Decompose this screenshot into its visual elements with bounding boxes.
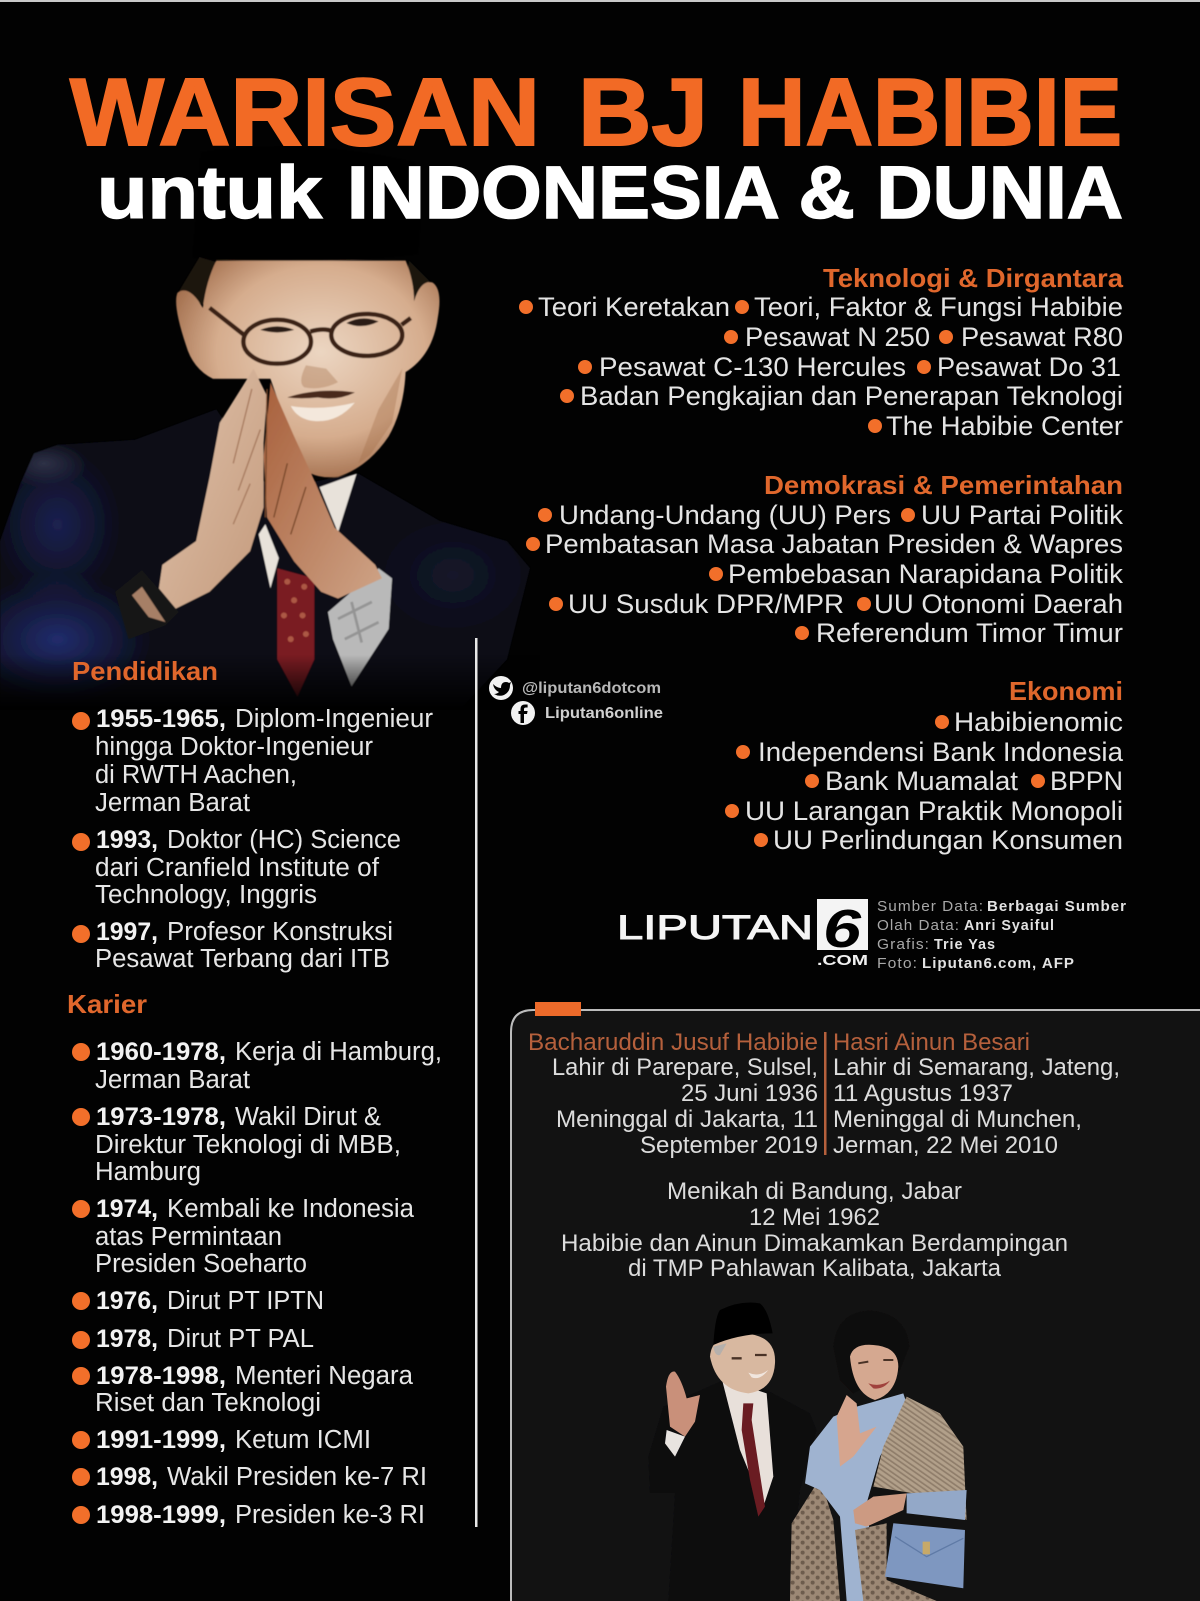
glasses [210,308,411,364]
biography: Ainun: Meninggal di Munchen, [833,1106,1082,1133]
shirt [722,1378,773,1507]
entry 1991-1999: Ketum ICMI [235,1426,371,1454]
title: untuk [97,151,323,234]
biography: Ainun: Jerman, 22 Mei 2010 [833,1132,1058,1159]
entry 1997: Pesawat Terbang dari ITB [95,945,390,973]
list: Referendum Timor Timur [816,618,1123,648]
entry 1978 [72,1325,314,1353]
list: The Habibie Center [886,411,1123,441]
list: Teori Keretakan [538,292,730,322]
entry 1955-1965: 1955-1965, [96,705,226,733]
list [725,707,1123,855]
entry 1998-1999: 1998-1999, [96,1501,226,1529]
title: HABIBIE [738,59,1122,166]
entry 1978-1998: Riset dan Teknologi [95,1389,321,1417]
credits: Berbagai Sumber [987,898,1127,915]
head [710,1333,775,1393]
list: Pesawat C-130 Hercules [599,352,906,382]
left shawl [790,1478,840,1601]
biography: Habibie: Meninggal di Jakarta, 11 [556,1106,818,1133]
shawl [873,1397,967,1520]
list: Bank Muamalat [825,766,1019,796]
entry 1973-1978: Direktur Teknologi di MBB, [95,1131,401,1159]
entry 1976: 1976, [96,1287,158,1315]
entry 1997 [72,918,393,973]
resting hand [853,1493,907,1527]
waving hand [837,1395,877,1467]
entry 1998-1999 [72,1501,425,1529]
entry 1978: 1978, [96,1325,158,1353]
credits: Anri Syaiful [964,917,1055,934]
biography: Habibie [528,1029,818,1159]
entry 1978-1998: 1978-1998, [96,1362,226,1390]
credits: Trie Yas [934,936,996,953]
heading: Teknologi & Dirgantara [823,263,1124,293]
portrait fade to black [0,655,540,730]
credits: Foto: [877,955,918,972]
marriage and burial note [561,1178,1068,1282]
biography: Ainun [833,1029,1120,1159]
biography: Ainun: Hasri Ainun Besari [833,1029,1030,1056]
face [176,261,439,477]
peci hat [713,1302,773,1345]
lower batik [855,1523,937,1601]
list: UU Perlindungan Konsumen [773,825,1123,855]
entry 1973-1978: Hamburg [95,1158,201,1186]
list: Teori, Faktor & Fungsi Habibie [754,292,1123,322]
logo: Liputan6.com [617,899,868,969]
entry 1978-1998 [72,1362,414,1417]
panel: Teknologi & Dirgantara [519,263,1124,441]
title: INDONESIA & DUNIA [347,151,1123,234]
entry 1993: Doktor (HC) Science [167,826,401,854]
list: Habibienomic [954,707,1123,737]
biography: Habibie: Lahir di Parepare, Sulsel, [552,1054,818,1081]
entry 1974: 1974, [96,1195,158,1223]
tie [742,1403,765,1517]
shirt cuff [328,568,392,686]
list: BPPN [1050,766,1123,796]
entry 1991-1999 [72,1426,371,1454]
credits: Sumber Data: [877,898,984,915]
sleeve [907,1490,967,1520]
panel: Pendidikan [72,656,434,973]
entry 1998-1999: Presiden ke-3 RI [235,1501,425,1529]
entry 1976: Dirut PT IPTN [167,1287,324,1315]
entry 1960-1978: 1960-1978, [96,1038,226,1066]
orange tab [535,1002,581,1016]
icon: twitter [489,676,513,700]
entry 1993: Technology, Inggris [95,881,317,909]
social media handles: Liputan6online [545,705,663,722]
entry 1974 [72,1195,415,1278]
portrait photo: Habibie with hands together [0,257,530,696]
list: Independensi Bank Indonesia [758,737,1123,767]
waving hand [666,1372,700,1437]
list: Pesawat N 250 [745,322,930,352]
hat [193,147,419,262]
title: BJ [578,59,708,166]
entry 1997: Profesor Konstruksi [167,918,393,946]
list [526,500,1124,648]
left hand [159,369,267,609]
heading: Ekonomi [1009,676,1123,706]
biography: Habibie: September 2019 [640,1132,818,1159]
credits: Olah Data: [877,917,960,934]
panel: biography card [511,1002,1200,1601]
credits: Grafis: [877,936,930,953]
jacket [648,1382,817,1601]
vertical divider [475,638,478,1527]
marriage and burial note: di TMP Pahlawan Kalibata, Jakarta [628,1255,1002,1282]
list: Badan Pengkajian dan Penerapan Teknologi [580,381,1123,411]
entry 1955-1965: hingga Doktor-Ingenieur [95,733,374,761]
title [70,59,1123,234]
panel: Demokrasi & Pemerintahan [526,470,1124,648]
list [519,292,1123,441]
entry 1955-1965: Diplom-Ingenieur [235,705,434,733]
heading: Demokrasi & Pemerintahan [764,470,1123,500]
moustache and smile [287,391,355,398]
logo: Liputan6.com: .COM [817,952,868,969]
entry 1973-1978: Wakil Dirut & [235,1103,381,1131]
list: UU Otonomi Daerah [874,589,1123,619]
social media handles [489,676,663,725]
entry 1955-1965 [72,705,434,817]
entry 1955-1965: Jerman Barat [95,789,250,817]
entry 1960-1978: Kerja di Hamburg, [235,1038,442,1066]
entry 1974: Presiden Soeharto [95,1250,307,1278]
shirt collar [259,474,357,588]
credits [877,898,1127,972]
logo: Liputan6.com: LIPUTAN [617,909,813,947]
right hand [264,382,382,599]
photo: Habibie and Ainun [648,1302,967,1601]
marriage and burial note: Habibie dan Ainun Dimakamkan Berdampingan [561,1230,1068,1257]
tie [277,568,314,697]
list: UU Partai Politik [921,500,1124,530]
entry 1998: 1998, [96,1463,158,1491]
icon: facebook [511,701,535,725]
list: Pesawat R80 [961,322,1123,352]
entry 1973-1978: 1973-1978, [96,1103,226,1131]
entry 1993 [72,826,401,909]
entry 1998: Wakil Presiden ke-7 RI [167,1463,427,1491]
biography: Ainun: 11 Agustus 1937 [833,1080,1013,1107]
entry 1993: dari Cranfield Institute of [95,854,380,882]
heading: Pendidikan [72,656,218,686]
cheek and nose shading [301,365,402,463]
list: Pesawat Do 31 [937,352,1121,382]
marriage and burial note: 12 Mei 1962 [749,1204,880,1231]
entry 1974: Kembali ke Indonesia [167,1195,415,1223]
handbag [885,1523,965,1588]
entry 1991-1999: 1991-1999, [96,1426,226,1454]
heading: Karier [67,989,147,1019]
logo: Liputan6.com: 6 [823,899,862,959]
list: Pembebasan Narapidana Politik [728,559,1124,589]
entry 1976 [72,1287,324,1315]
entry 1960-1978: Jerman Barat [95,1066,250,1094]
entry 1960-1978 [72,1038,442,1094]
list: Undang-Undang (UU) Pers [559,500,891,530]
woman hair [833,1311,909,1393]
entry 1978-1998: Menteri Negara [235,1362,414,1390]
list: UU Larangan Praktik Monopoli [745,796,1123,826]
social media handles: @liputan6dotcom [522,680,661,697]
entry 1974: atas Permintaan [95,1223,282,1251]
biography: Ainun: Lahir di Semarang, Jateng, [833,1054,1120,1081]
entry 1978: Dirut PT PAL [167,1325,314,1353]
entry 1973-1978 [72,1103,401,1186]
list: Pembatasan Masa Jabatan Presiden & Wapres [545,529,1123,559]
biography: Habibie: Bacharuddin Jusuf Habibie [528,1029,818,1056]
panel: Karier [67,989,442,1529]
credits: Liputan6.com, AFP [922,955,1075,972]
entry 1997: 1997, [96,918,158,946]
hair [179,257,429,308]
entry 1955-1965: di RWTH Aachen, [95,761,297,789]
jacket [0,410,530,696]
entry 1993: 1993, [96,826,158,854]
kebaya [805,1393,907,1601]
title: WARISAN [70,59,540,166]
list: UU Susduk DPR/MPR [568,589,844,619]
watch strap [115,570,179,639]
marriage and burial note: Menikah di Bandung, Jabar [667,1178,962,1205]
eyes [260,318,379,332]
woman face [850,1345,898,1400]
panel: Ekonomi [725,676,1123,855]
biography: Habibie: 25 Juni 1936 [681,1080,818,1107]
card background [511,1010,1200,1601]
